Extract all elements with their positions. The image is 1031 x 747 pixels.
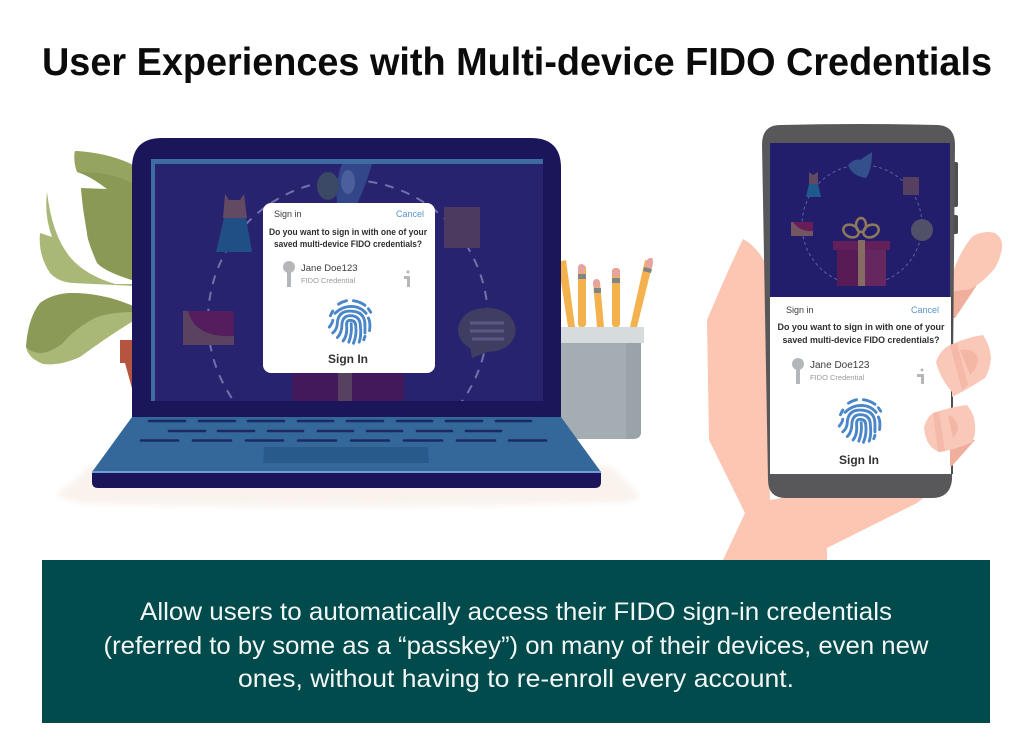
upper finger shade: [950, 285, 977, 318]
description banner: (referred to by some as a “passkey”) on many of their devices, even new: [104, 632, 929, 660]
phone screen: [770, 143, 950, 298]
ring fingernail: [948, 415, 958, 438]
middle finger band: [950, 343, 968, 390]
shoe item: [848, 152, 872, 178]
keys: [141, 421, 546, 440]
cup body: [561, 343, 641, 439]
purse item: [183, 311, 234, 345]
plant: [26, 151, 135, 392]
info icon: [404, 270, 410, 287]
keyboard deck: [92, 417, 601, 472]
dashed circle: [802, 165, 922, 285]
banner text: Allow users to automatically access their FIDO sign-in credentials: [140, 598, 892, 626]
phone info icon: [917, 368, 924, 384]
shoe inner: [341, 170, 355, 194]
gift item: [833, 218, 890, 286]
laptop: [92, 138, 601, 488]
bottom leaf: [26, 293, 135, 364]
bubble item: [911, 219, 933, 241]
top leaf: [74, 151, 135, 281]
deck edge: [92, 471, 601, 473]
bag item: [444, 207, 480, 248]
gift item: [292, 370, 404, 401]
dialog card: [263, 203, 435, 373]
left leaf: [40, 192, 135, 286]
phone account name: Jane Doe123: [810, 360, 870, 371]
middle fingernail: [960, 350, 978, 375]
top leaf upper lobe: [74, 151, 135, 185]
phone: [762, 124, 958, 498]
pot: [120, 340, 135, 392]
sign in label: Sign In: [328, 352, 368, 366]
dress item: [223, 194, 247, 218]
cancel link: Cancel: [396, 209, 424, 219]
laptop ground shadow: [56, 466, 639, 507]
phone dialog panel: [770, 297, 951, 474]
dialog question: Do you want to sign in with one of your: [269, 227, 427, 237]
description banner: [42, 560, 990, 723]
bottom leaf dark part: [26, 293, 135, 353]
title: User Experiences with Multi-device FIDO Credentials: [42, 41, 992, 84]
chat bubble item: [458, 308, 516, 358]
credential type: FIDO Credential: [301, 276, 356, 285]
bag item: [903, 177, 919, 195]
laptop sign-in dialog: [263, 203, 435, 373]
phone key icon: [792, 358, 804, 384]
banner background: [42, 560, 990, 723]
dress item: [809, 172, 818, 184]
cup shade: [626, 343, 641, 439]
laptop front edge: [92, 473, 601, 488]
screen illustration: [183, 164, 516, 401]
phone screen illustration: [791, 152, 933, 286]
palm: [707, 239, 950, 560]
shoe item: [337, 164, 372, 204]
phone dialog header: Sign in: [786, 305, 814, 315]
phone cancel link: Cancel: [911, 305, 939, 315]
ring finger band: [933, 412, 945, 452]
phone: saved multi-device FIDO credentials?: [782, 335, 940, 346]
pencils: [558, 258, 653, 327]
hand behind phone: [707, 232, 1002, 560]
description banner: ones, without having to re-enroll every account.: [238, 665, 794, 693]
trackpad: [263, 447, 429, 463]
side buttons: [952, 162, 958, 207]
laptop sign-in dialog: saved multi-device FIDO credentials?: [274, 239, 422, 249]
laptop lid: [132, 138, 561, 417]
fingers in front of phone: [924, 335, 991, 466]
account name: Jane Doe123: [301, 263, 358, 274]
cup rim: [561, 327, 644, 343]
phone dialog question: Do you want to sign in with one of your: [778, 322, 945, 333]
lower hand shade: [950, 440, 975, 466]
middle finger: [936, 335, 991, 397]
key icon: [283, 261, 295, 287]
dashed circle: [207, 180, 488, 401]
envelope item: [791, 222, 813, 236]
phone right edge line: [951, 297, 953, 474]
fingerprint icon: [329, 301, 371, 343]
laptop screen: [151, 159, 543, 401]
phone body: [762, 124, 955, 498]
phone fingerprint icon: [839, 400, 881, 442]
pencil cup: [558, 258, 653, 439]
screen edge highlights: [151, 159, 543, 401]
phone credential type: FIDO Credential: [810, 373, 865, 382]
ring finger: [924, 405, 975, 452]
dialog header: Sign in: [274, 209, 302, 219]
apple item: [317, 172, 339, 200]
upper finger: [950, 232, 1002, 318]
phone sign in label: Sign In: [839, 453, 879, 467]
